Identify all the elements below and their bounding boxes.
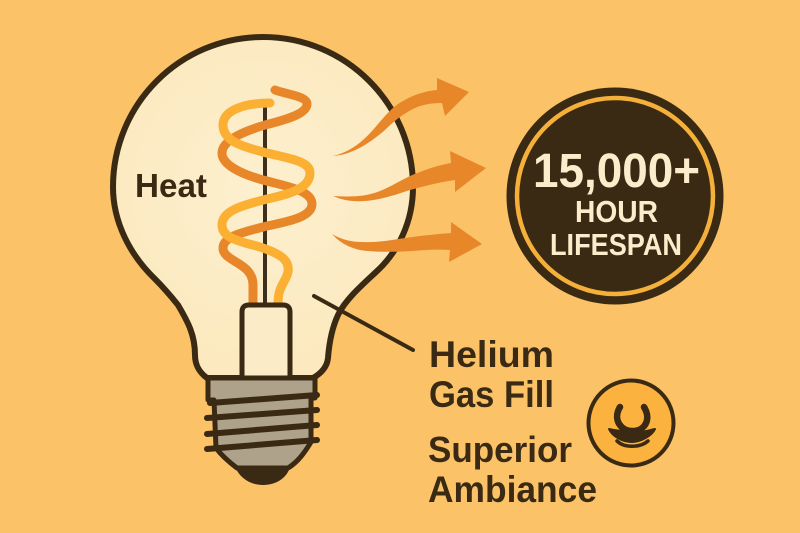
- filament: yellow coil: [222, 103, 310, 303]
- callout leader line: [314, 296, 413, 350]
- arrow: middle heat: [333, 151, 486, 201]
- label: Superior Ambiance: Ambiance: [428, 469, 597, 510]
- filament support wire: [263, 107, 267, 306]
- screw base: [207, 378, 317, 485]
- label: Superior Ambiance: [428, 429, 597, 510]
- filament: orange coil: [222, 90, 312, 303]
- label: Helium Gas Fill: [429, 334, 554, 415]
- label: Helium Gas Fill: Helium: [429, 334, 554, 375]
- label: Helium Gas Fill: Gas Fill: [429, 374, 554, 415]
- badge caption line 1: HOUR: [575, 194, 658, 229]
- label: Heat: Heat: [135, 167, 207, 204]
- lifespan badge: [506, 88, 724, 304]
- badge caption line 2: LIFESPAN: [550, 227, 682, 262]
- light bulb glass: [113, 37, 413, 378]
- icon: ambiance badge: [588, 380, 674, 466]
- label: Superior Ambiance: Superior: [428, 429, 572, 470]
- arrow: top heat: [333, 78, 469, 156]
- badge number: 15,000+: [533, 145, 700, 198]
- arrow: bottom heat: [332, 222, 482, 262]
- filament socket: [242, 305, 290, 378]
